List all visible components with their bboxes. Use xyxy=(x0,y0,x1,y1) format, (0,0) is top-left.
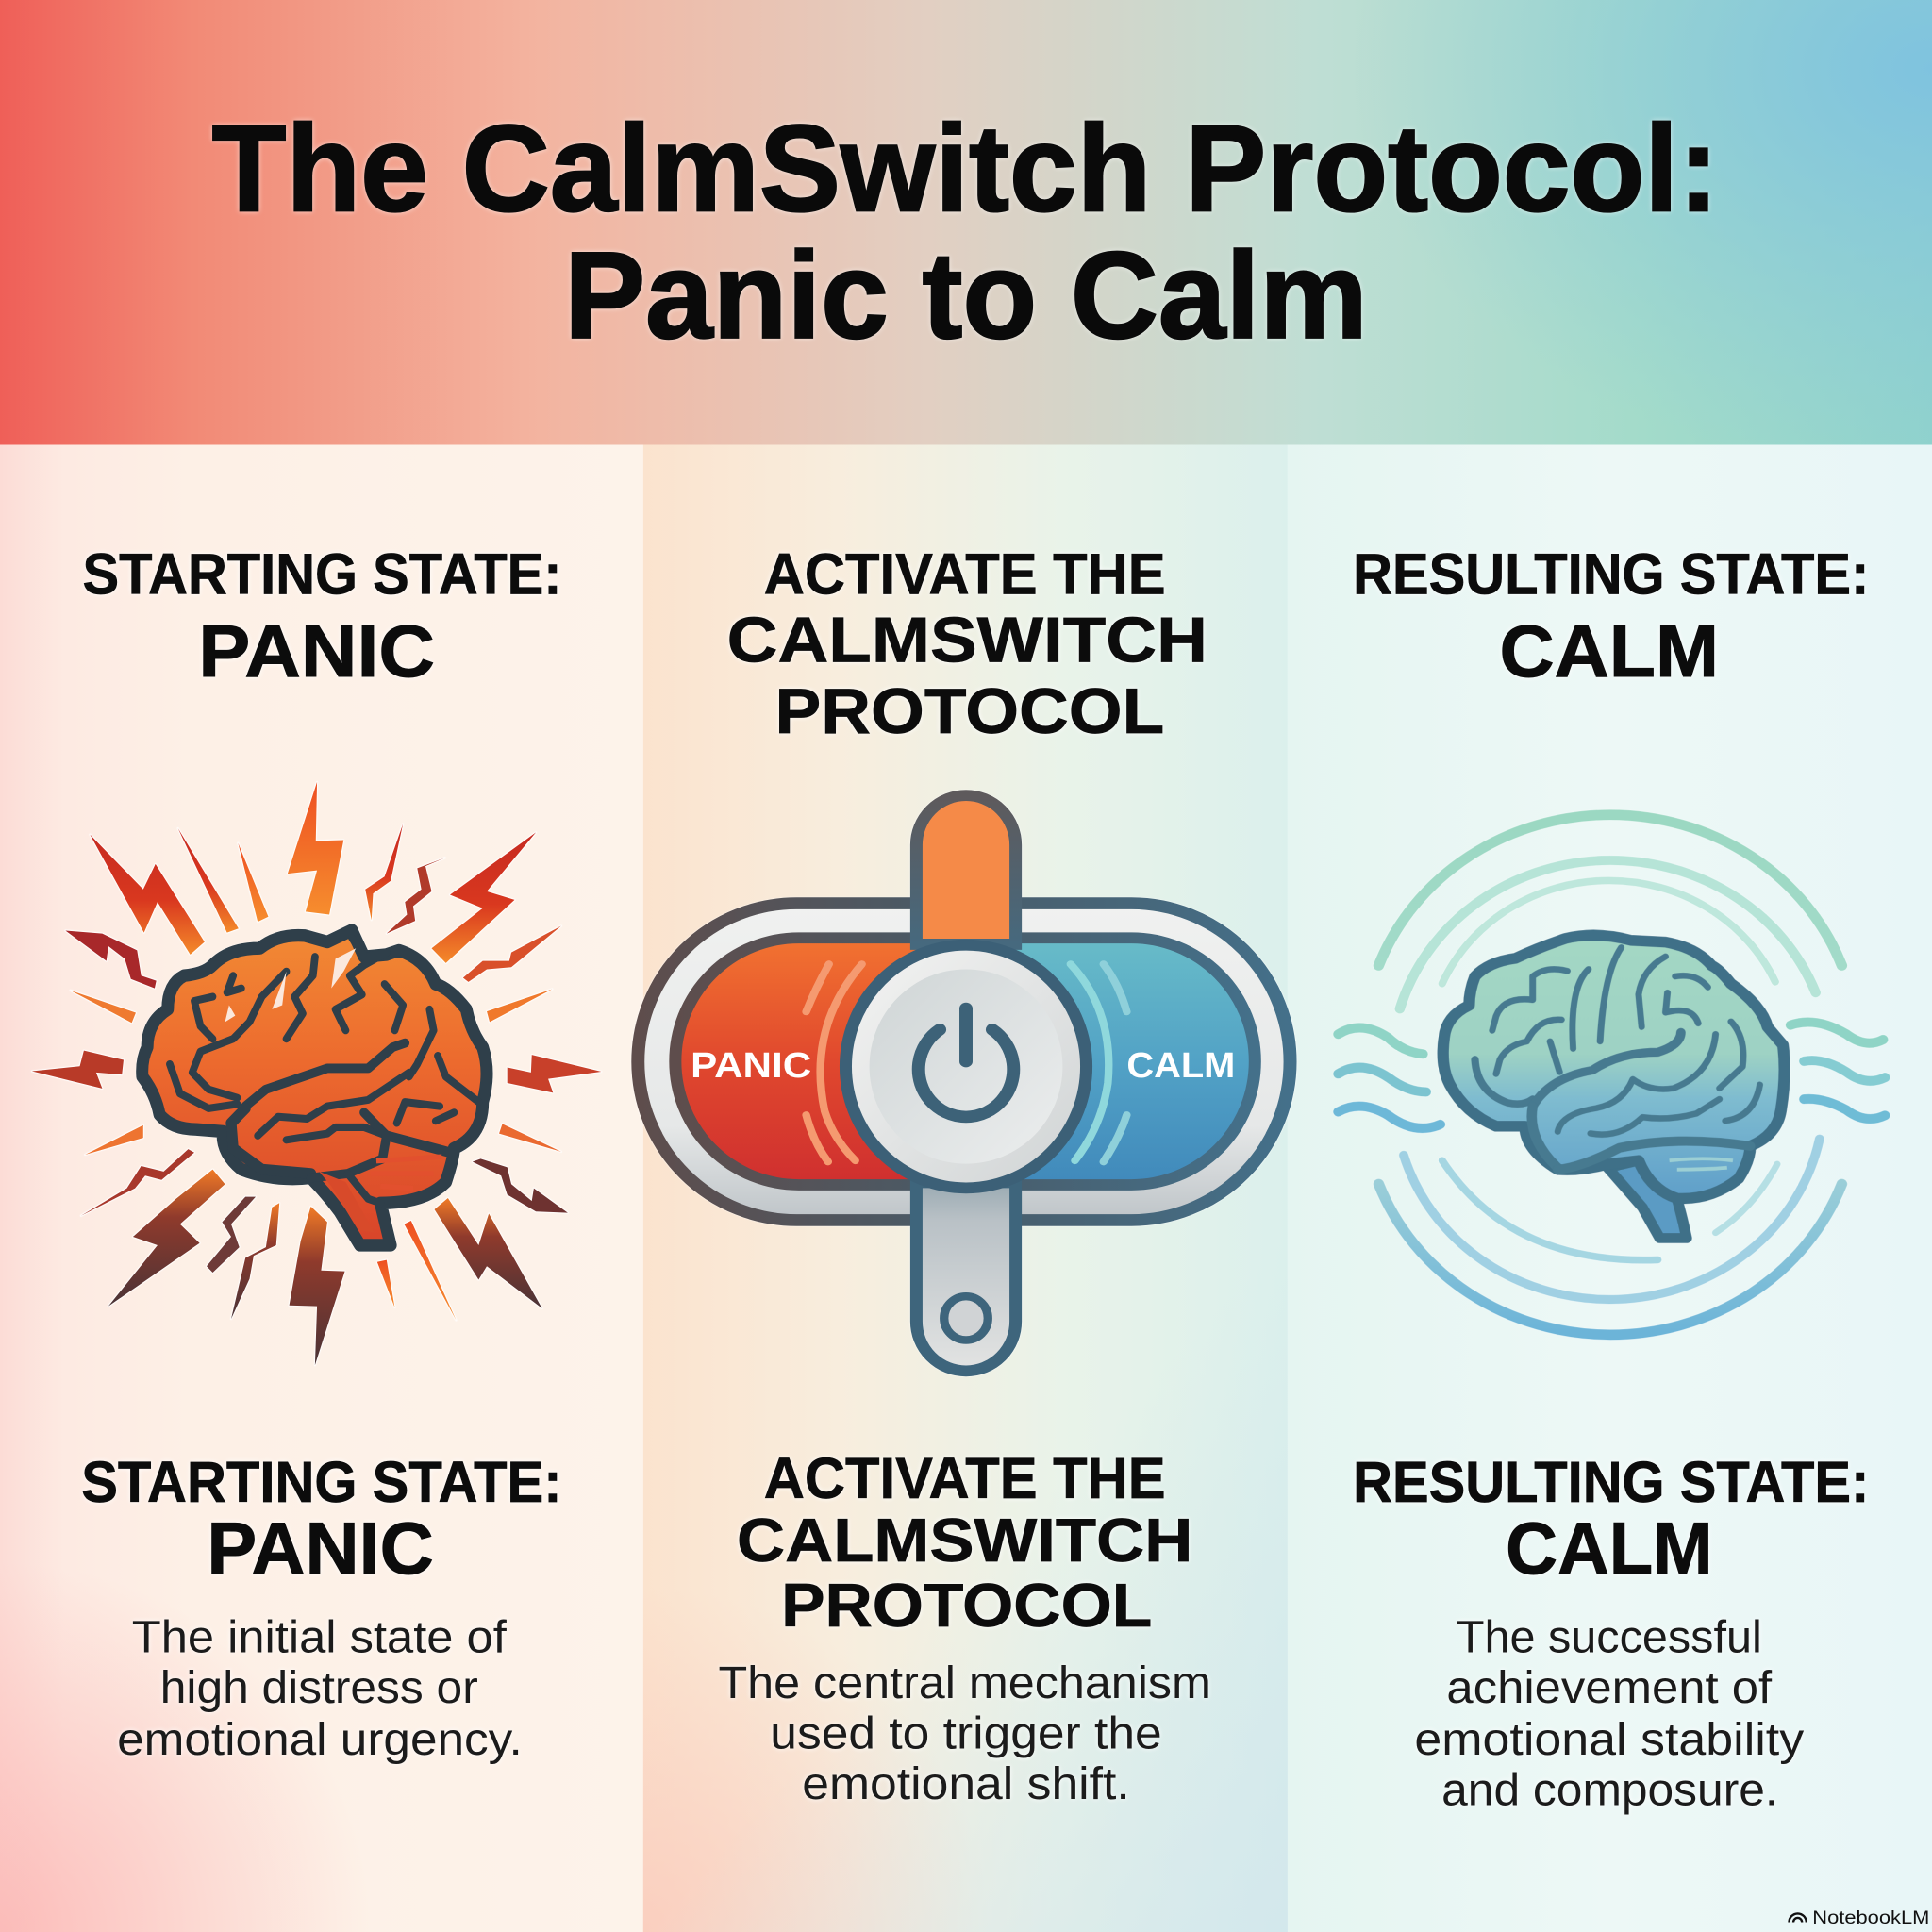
title: Panic to Calm xyxy=(564,226,1368,364)
heading: starting state: STARTING STATE: xyxy=(83,542,562,608)
description: calm: RESULTING STATE: xyxy=(1353,1450,1869,1515)
title xyxy=(212,99,1719,364)
panel: activate the protocol xyxy=(638,445,1291,1932)
brain body xyxy=(1443,935,1785,1199)
description: panic xyxy=(81,1450,562,1765)
description: activate xyxy=(718,1446,1211,1809)
brain folds xyxy=(1474,947,1759,1170)
silver bottom lever xyxy=(916,1182,1016,1371)
description: panic: PANIC xyxy=(207,1507,434,1590)
header band background xyxy=(0,0,1932,445)
heading: activate xyxy=(727,542,1208,747)
motion arcs xyxy=(807,964,1126,1162)
description: activate: used to trigger the xyxy=(770,1707,1162,1758)
description: panic: emotional urgency. xyxy=(117,1714,523,1765)
description: calm: and composure. xyxy=(1441,1764,1778,1815)
description: calm xyxy=(1353,1450,1869,1815)
heading: activate: ACTIVATE THE xyxy=(764,542,1166,608)
heading: activate: PROTOCOL xyxy=(775,676,1164,747)
ripple arcs xyxy=(1378,815,1841,1335)
icon: cracked brain with lightning xyxy=(32,782,601,1365)
heading: activate: CALMSWITCH xyxy=(727,605,1208,675)
panel: starting state panic xyxy=(0,445,643,1932)
description: calm: The successful xyxy=(1457,1612,1762,1663)
labels: PANIC xyxy=(691,1046,811,1085)
heading: resulting state: CALM xyxy=(1500,609,1719,692)
description: activate: ACTIVATE THE xyxy=(764,1446,1166,1511)
description: activate: The central mechanism xyxy=(718,1657,1211,1708)
title: The CalmSwitch Protocol: xyxy=(212,99,1719,237)
icon: toggle switch xyxy=(638,795,1291,1371)
power knob xyxy=(845,945,1087,1188)
description: panic: The initial state of xyxy=(132,1612,507,1663)
icon: toggle switch: CALM xyxy=(1126,1046,1235,1085)
heading: resulting state: RESULTING STATE: xyxy=(1353,542,1869,608)
switch housing xyxy=(638,904,1291,1220)
description: calm: achievement of xyxy=(1446,1662,1773,1713)
calm side xyxy=(966,938,1255,1185)
description: panic: STARTING STATE: xyxy=(81,1450,562,1515)
wave lines xyxy=(1339,1022,1885,1128)
description: calm: emotional stability xyxy=(1414,1714,1805,1765)
orange top lever xyxy=(916,795,1016,944)
description: activate: emotional shift. xyxy=(802,1758,1130,1809)
description: activate: CALMSWITCH xyxy=(737,1506,1192,1574)
description: activate: PROTOCOL xyxy=(781,1571,1152,1640)
heading: starting state: PANIC xyxy=(198,609,435,692)
watermark: NotebookLM: NotebookLM xyxy=(1812,1908,1929,1928)
brain folds xyxy=(170,938,478,1203)
icon: calm brain with waves xyxy=(1339,815,1885,1335)
panel: resulting state calm xyxy=(1288,445,1932,1932)
description: panic: high distress or xyxy=(160,1662,478,1713)
description: calm: CALM xyxy=(1506,1507,1713,1590)
panic side xyxy=(675,938,966,1185)
heading: starting state xyxy=(83,542,562,692)
heading: resulting state xyxy=(1353,542,1869,692)
brain stem xyxy=(1607,1160,1687,1238)
power symbol xyxy=(919,1029,1013,1117)
lightning bolts xyxy=(32,782,601,1365)
brain body xyxy=(142,930,487,1245)
